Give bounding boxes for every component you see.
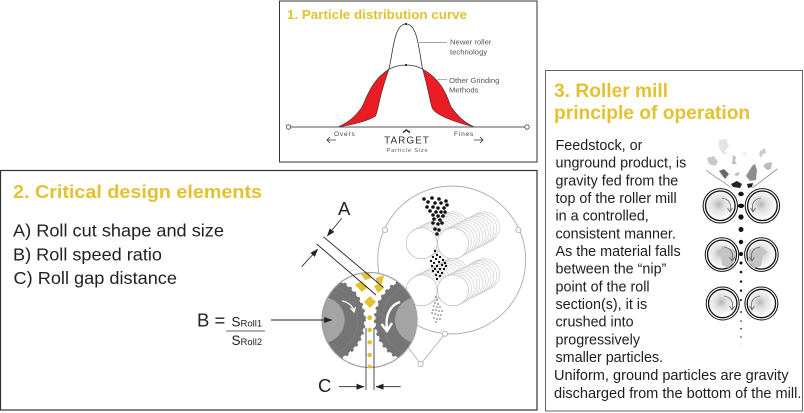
heading: roller mill principle of operation: 3. Roller mill <box>554 81 668 102</box>
chart: distribution curves <box>286 23 529 129</box>
list: design elements: B) Roll speed ratio <box>13 244 162 264</box>
particles: coarse <box>422 196 449 236</box>
material falling through rollers <box>738 192 744 344</box>
particles: fine <box>431 296 443 323</box>
label: fines with arrow <box>454 131 483 143</box>
label: target particle size <box>384 130 430 154</box>
diagram: large circle with roller stacks <box>378 186 526 367</box>
heading: particle distribution curve: 1. Particle distribution curve <box>287 8 467 22</box>
label: other grinding methods: Methods <box>449 86 479 94</box>
callout: B roll speed ratio formula <box>197 310 332 348</box>
text block: process description: top of the roller mill <box>556 191 677 207</box>
label: target particle size: Particle Size <box>386 148 429 154</box>
heading: critical design elements: 2. Critical design elements <box>13 181 262 202</box>
panel: critical design elements <box>0 170 537 410</box>
callout: B roll speed ratio formula: B = <box>197 310 225 331</box>
icon: small rotation arrow <box>342 301 356 312</box>
text block: process description: Feedstock, or <box>556 138 643 154</box>
text block: process description: As the material falls <box>556 244 681 260</box>
icon: large rotation arrow <box>382 302 400 331</box>
label: overs with arrow: Overs <box>334 131 356 138</box>
rollers: row 1 <box>703 189 780 223</box>
text block: process description: gravity fed from the <box>556 173 678 189</box>
text block: process description: point of the roll <box>556 279 650 295</box>
text block: process description: discharged from the bottom of the mill. <box>554 386 801 402</box>
callout: A roll cut dimension <box>302 198 383 295</box>
text block: process description: crushed into <box>556 315 634 331</box>
diagram: roll cross-section <box>321 272 418 368</box>
text block: process description: in a controlled, <box>556 209 649 225</box>
list: design elements: C) Roll gap distance <box>14 268 177 288</box>
text block: process description: smaller particles. <box>556 350 663 366</box>
callout: B roll speed ratio formula: SRoll1 <box>232 314 262 330</box>
label: newer roller technology: technology <box>450 48 487 56</box>
label: newer roller technology: Newer roller <box>450 38 492 46</box>
rollers: row 2 <box>705 238 778 271</box>
label: other grinding methods: Other Grinding <box>449 76 499 85</box>
list: design elements <box>13 220 224 288</box>
panel: roller mill principle of operation <box>546 70 802 411</box>
text block: process description: between the “nip” <box>556 262 667 278</box>
text block: process description: progressively <box>556 332 641 348</box>
list: design elements: A) Roll cut shape and size <box>13 220 224 240</box>
particles: medium <box>430 250 447 280</box>
feedstock shards <box>706 139 778 188</box>
text block: process description: section(s), it is <box>556 297 647 313</box>
callout: C roll gap distance: C <box>318 375 331 396</box>
callout: B roll speed ratio formula: SRoll2 <box>232 333 262 348</box>
label: target particle size: TARGET <box>384 136 430 146</box>
rollers: row 3 <box>706 287 778 320</box>
callout: C roll gap distance <box>318 328 401 396</box>
text block: process description: unground product, is <box>556 156 686 172</box>
panel: particle distribution curve <box>280 1 537 162</box>
text block: process description: consistent manner. <box>556 226 676 242</box>
label: fines with arrow: Fines <box>454 131 474 138</box>
text block: process description: Uniform, ground particles are gravity <box>554 368 789 384</box>
heading: roller mill principle of operation: principle of operation <box>554 103 750 124</box>
label: overs with arrow <box>327 131 356 143</box>
callout: A roll cut dimension: A <box>338 198 351 219</box>
particles: yellow ground material <box>355 273 384 368</box>
diagram: roller mill operation <box>703 139 780 344</box>
